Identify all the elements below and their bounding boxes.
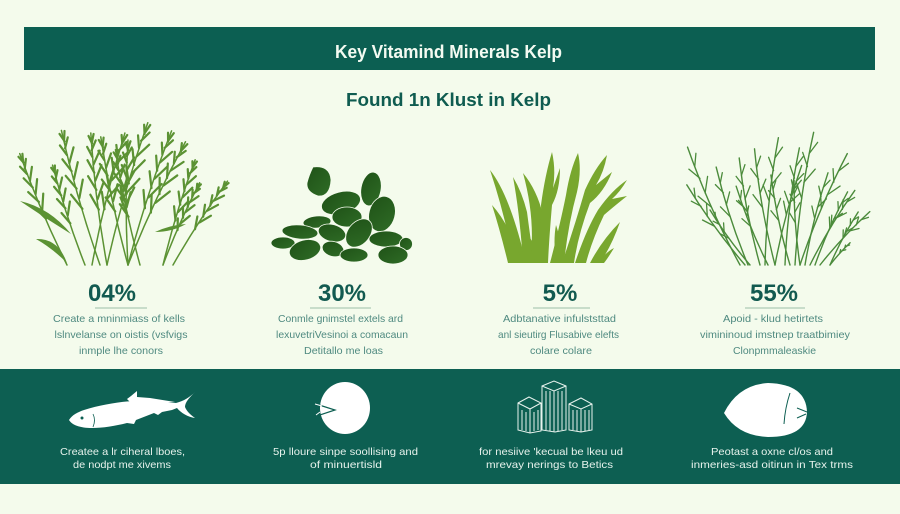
title: Key Vitamind Minerals Kelp xyxy=(335,42,562,62)
caption xyxy=(479,446,623,471)
caption xyxy=(691,446,853,471)
bottom item: fish xyxy=(60,391,195,471)
description: Detitallo me loas xyxy=(304,345,383,357)
description xyxy=(498,313,619,357)
percentage: 5% xyxy=(543,280,577,307)
description: lslnvelanse on oistis (vsfvigs xyxy=(54,329,188,341)
percentage: 55% xyxy=(750,280,798,307)
description: Apoid - klud hetirtets xyxy=(723,313,823,325)
caption: Peotast a oxne cl/os and xyxy=(711,446,833,458)
caption: 5p lloure sinpe soollising and xyxy=(273,446,418,458)
description: Clonpmmaleaskie xyxy=(733,345,816,357)
description: inmple lhe conors xyxy=(79,345,163,357)
caption: Createe a lr ciheral lboes, xyxy=(60,446,185,458)
panel: kelp stat 1 xyxy=(13,120,232,357)
icon: white seed shape xyxy=(724,383,807,437)
icon: white circle with clip xyxy=(315,382,370,434)
description: anl sieutirg Flusabive elefts xyxy=(498,329,619,341)
icon: bushy kelp sprigs xyxy=(13,120,232,268)
icon: fish xyxy=(69,391,195,428)
bottom band xyxy=(0,369,900,484)
description: lexuvetriVesinoi a comacaun xyxy=(276,329,408,341)
caption: inmeries-asd oitirun in Tex trms xyxy=(691,459,853,471)
description xyxy=(53,313,188,357)
panel: kelp stat 4 xyxy=(678,131,872,357)
description: colare colare xyxy=(530,345,592,357)
caption: for nesiive 'kecual be lkeu ud xyxy=(479,446,623,458)
bottom item: seed xyxy=(691,383,853,471)
bottom item: round shape xyxy=(273,382,418,471)
caption xyxy=(273,446,418,471)
description xyxy=(276,313,408,357)
panel: kelp stat 2 xyxy=(271,167,412,357)
caption: mrevay nerings to Betics xyxy=(486,459,613,471)
icon: thin kelp strands xyxy=(678,131,872,270)
icon: broad-blade kelp xyxy=(490,152,627,263)
description: Create a mninmiass of kells xyxy=(53,313,185,325)
subtitle: Found 1n Klust in Kelp xyxy=(346,90,551,110)
caption: of minuertisld xyxy=(310,459,382,471)
percentage: 30% xyxy=(318,280,366,307)
panel: kelp stat 3 xyxy=(490,152,627,357)
description xyxy=(700,313,851,357)
caption: de nodpt me xivems xyxy=(73,459,171,471)
description: Adbtanative infulststtad xyxy=(503,313,616,325)
description: vimininoud imstnep traatbimiey xyxy=(700,329,851,341)
bottom item: columns xyxy=(479,381,623,471)
icon: pile of dark green nodules xyxy=(271,167,412,264)
description: Conmle gnimstel extels ard xyxy=(278,313,403,325)
caption xyxy=(60,446,185,471)
percentage: 04% xyxy=(88,280,136,307)
icon: three outlined boxes xyxy=(518,381,592,433)
title banner xyxy=(24,27,875,70)
